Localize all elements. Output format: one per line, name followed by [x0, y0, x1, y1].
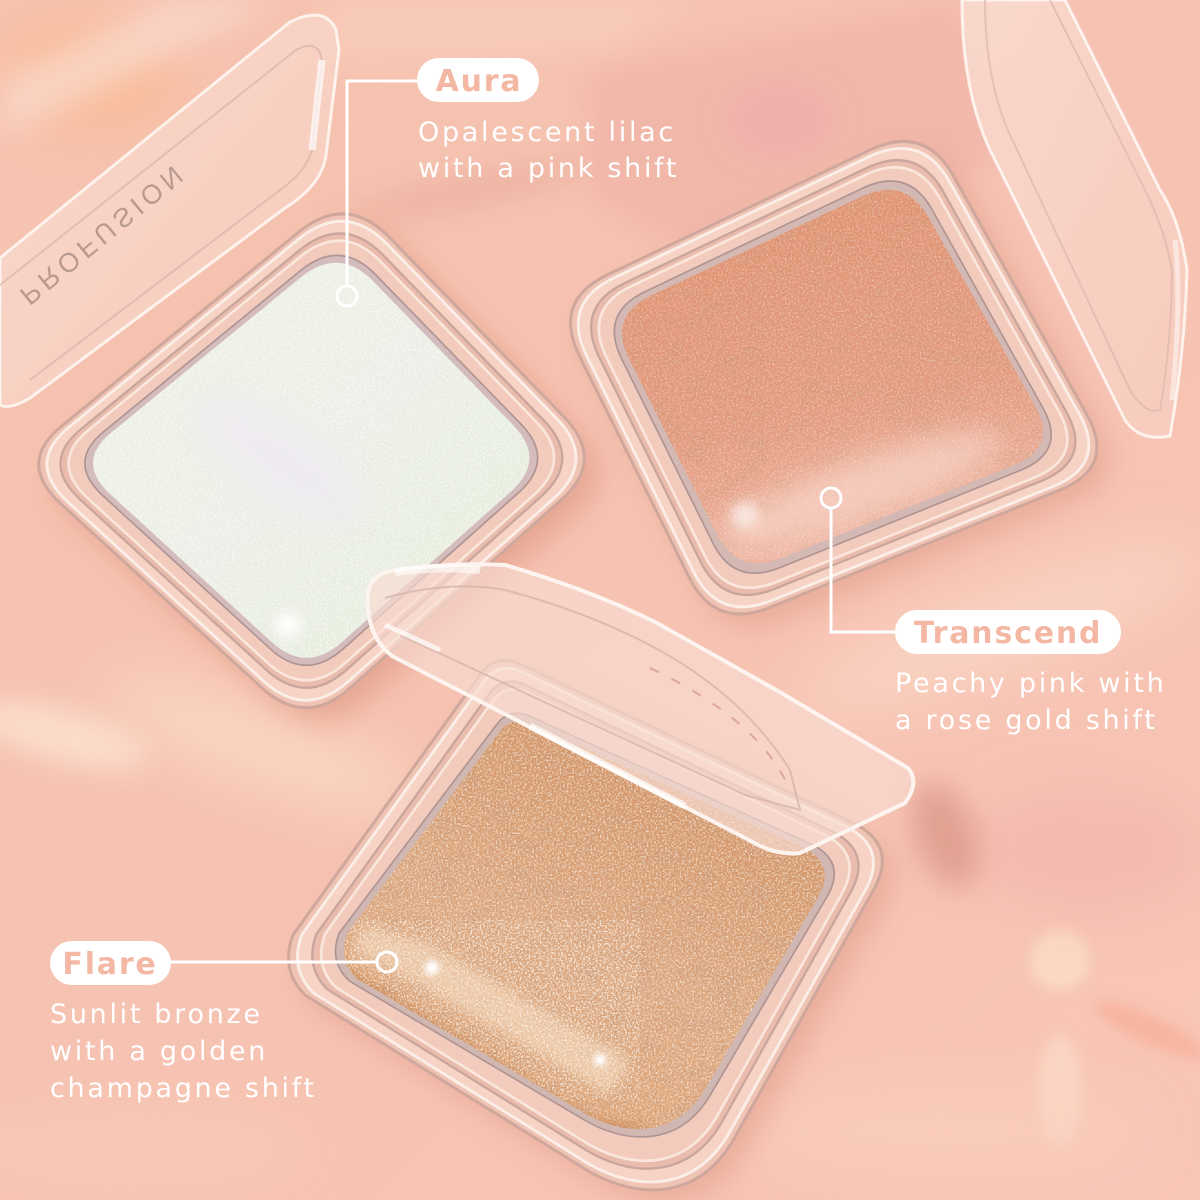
label pill: Aura [417, 58, 539, 102]
label pill: Flare [50, 941, 171, 985]
shadow: Flare [301, 672, 894, 1200]
lid: Flare [368, 564, 913, 853]
case: Flare [289, 660, 882, 1190]
case: Aura [39, 214, 584, 708]
shadow: Aura [53, 228, 598, 722]
leader line: Transcend [831, 508, 895, 632]
brand text on lid: PROFUSION [14, 157, 192, 311]
description: Flare: with a golden [50, 1036, 268, 1067]
lid: Aura [0, 15, 339, 406]
callout: Flare [50, 941, 397, 1104]
compact: Aura [0, 15, 598, 722]
description: Transcend: a rose gold shift [895, 705, 1158, 736]
marker: Aura [337, 286, 357, 306]
label pill: Flare: Flare [62, 947, 158, 982]
callout: Transcend [821, 488, 1166, 736]
case: Transcend [571, 141, 1097, 614]
label pill: Transcend: Transcend [914, 616, 1102, 651]
pan: Flare [344, 722, 825, 1129]
lid: Transcend [962, 0, 1187, 437]
description: Aura: Opalescent lilac [418, 117, 676, 148]
label pill: Aura: Aura [436, 64, 522, 99]
marker: Transcend [821, 488, 841, 508]
compact: Flare [289, 564, 913, 1200]
description: Flare: Sunlit bronze [50, 999, 263, 1030]
callout: Aura [337, 58, 679, 306]
leader line: Flare [170, 960, 377, 964]
description: Aura: with a pink shift [418, 153, 679, 184]
description: Transcend: Peachy pink with [895, 668, 1166, 699]
marker: Flare [377, 952, 397, 972]
description: Flare: champagne shift [50, 1073, 317, 1104]
pan: Transcend [610, 180, 1050, 569]
leader line: Aura [347, 81, 418, 285]
shadow: Transcend [583, 153, 1109, 626]
pan: Aura [80, 250, 540, 660]
label pill: Transcend [895, 610, 1121, 654]
compact: Transcend [571, 0, 1187, 626]
